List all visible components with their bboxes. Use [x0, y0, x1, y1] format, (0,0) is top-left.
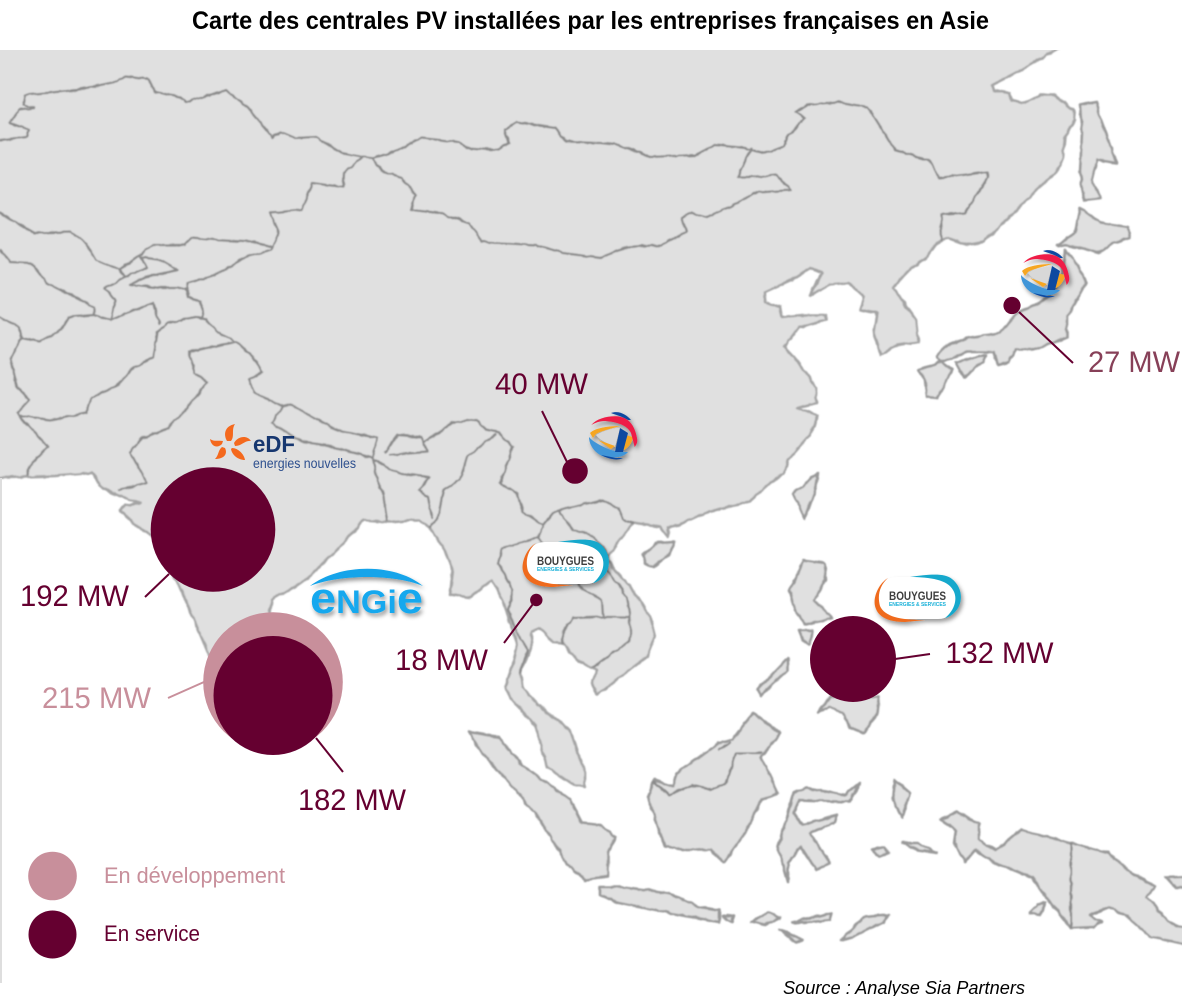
label: 27 MW: 27 MW: [1088, 346, 1181, 379]
land: Sumatra: [469, 732, 615, 880]
logo: ENGIE: [310, 569, 423, 623]
left edge rule: [0, 478, 2, 983]
text: Energies & Services: ENERGIES & SERVICES: [889, 602, 947, 608]
land: Kyushu: [918, 362, 952, 398]
legend swatch: en développement: [28, 852, 77, 900]
logo: Bouygues (Thailand): [523, 540, 609, 587]
leader line: 18 MW: [504, 604, 533, 643]
land: Yos Sudarso: [1029, 903, 1046, 915]
land: Taiwan: [793, 473, 818, 518]
leader line: 215 MW: [168, 682, 204, 698]
text: eNGie: eNGie: [310, 574, 423, 623]
land: Honshu: [937, 250, 1086, 365]
title: Carte des centrales PV installées par les entreprises françaises en Asie: [192, 7, 989, 35]
label: 132 MW: 132 MW: [946, 637, 1054, 670]
text: BOUYGUES: BOUYGUES: [889, 589, 946, 603]
label: 182 MW: 182 MW: [298, 784, 407, 817]
legend: [28, 852, 285, 958]
leader line: 40 MW: [542, 411, 567, 462]
logo: Total (China): [589, 412, 637, 459]
land: Mindanao: [818, 697, 879, 733]
text: eDF: eDF: [253, 431, 295, 457]
legend swatch: en service: [28, 910, 76, 958]
leader line: 27 MW: [1019, 312, 1073, 363]
land: Hokkaido: [1057, 208, 1130, 253]
text: energies nouvelles: energies nouvelles: [253, 455, 356, 471]
land: Sulawesi: [778, 783, 860, 882]
bubble: Total Japan 27 MW: [1003, 297, 1021, 314]
land: Luzon: [789, 560, 832, 625]
land: New Guinea: [941, 812, 1190, 945]
label: 192 MW: 192 MW: [20, 580, 130, 613]
bubble: Bouygues Thailand 18 MW: [530, 594, 542, 606]
land: Asian mainland: [0, 30, 1090, 787]
bubble: Bouygues Philippines 132 MW: [810, 616, 896, 702]
land: Palawan: [757, 658, 788, 695]
land: Seram: [902, 843, 937, 853]
bubble: ENGIE India 215 MW in development: [203, 612, 343, 752]
land: Sumbawa: [751, 912, 780, 925]
logo: Bouygues (Philippines): [875, 575, 961, 622]
land: Hainan: [643, 542, 675, 567]
label: 215 MW: 215 MW: [42, 682, 152, 715]
label: 40 MW: 40 MW: [495, 368, 589, 401]
national borders: [0, 76, 1071, 928]
bubble: Total China 40 MW: [562, 458, 588, 484]
land: Bali: [722, 915, 734, 922]
land: Shikoku: [956, 355, 986, 377]
land: Timor: [841, 915, 889, 940]
land: Java: [600, 887, 719, 922]
icon: ENGIE arc: [310, 569, 423, 586]
text: BOUYGUES: BOUYGUES: [537, 554, 594, 568]
logo: EDF energies nouvelles: [210, 424, 356, 471]
legend label: en développement: En développement: [104, 863, 285, 888]
land: Borneo: [648, 713, 780, 862]
land: New Britain: [1166, 876, 1190, 888]
leader line: 132 MW: [895, 654, 930, 659]
land: Sakhalin: [1080, 102, 1117, 200]
label: 18 MW: 18 MW: [395, 644, 489, 677]
text: Energies & Services: ENERGIES & SERVICES: [537, 567, 595, 573]
bubble: ENGIE India 182 MW in service: [214, 636, 332, 755]
land: Visayas: [799, 630, 812, 645]
land: Flores: [793, 913, 832, 923]
bubble: EDF India 192 MW in service: [151, 467, 275, 592]
land: Buru: [872, 847, 889, 857]
legend label: en service: En service: [104, 921, 200, 946]
icon: EDF orange flower: [210, 424, 251, 460]
leader line: 192 MW: [145, 574, 169, 597]
land: Sumba: [780, 930, 803, 943]
leader line: 182 MW: [316, 738, 343, 772]
land: Halmahera: [893, 780, 910, 817]
logo: Total (Japan): [1021, 250, 1069, 297]
